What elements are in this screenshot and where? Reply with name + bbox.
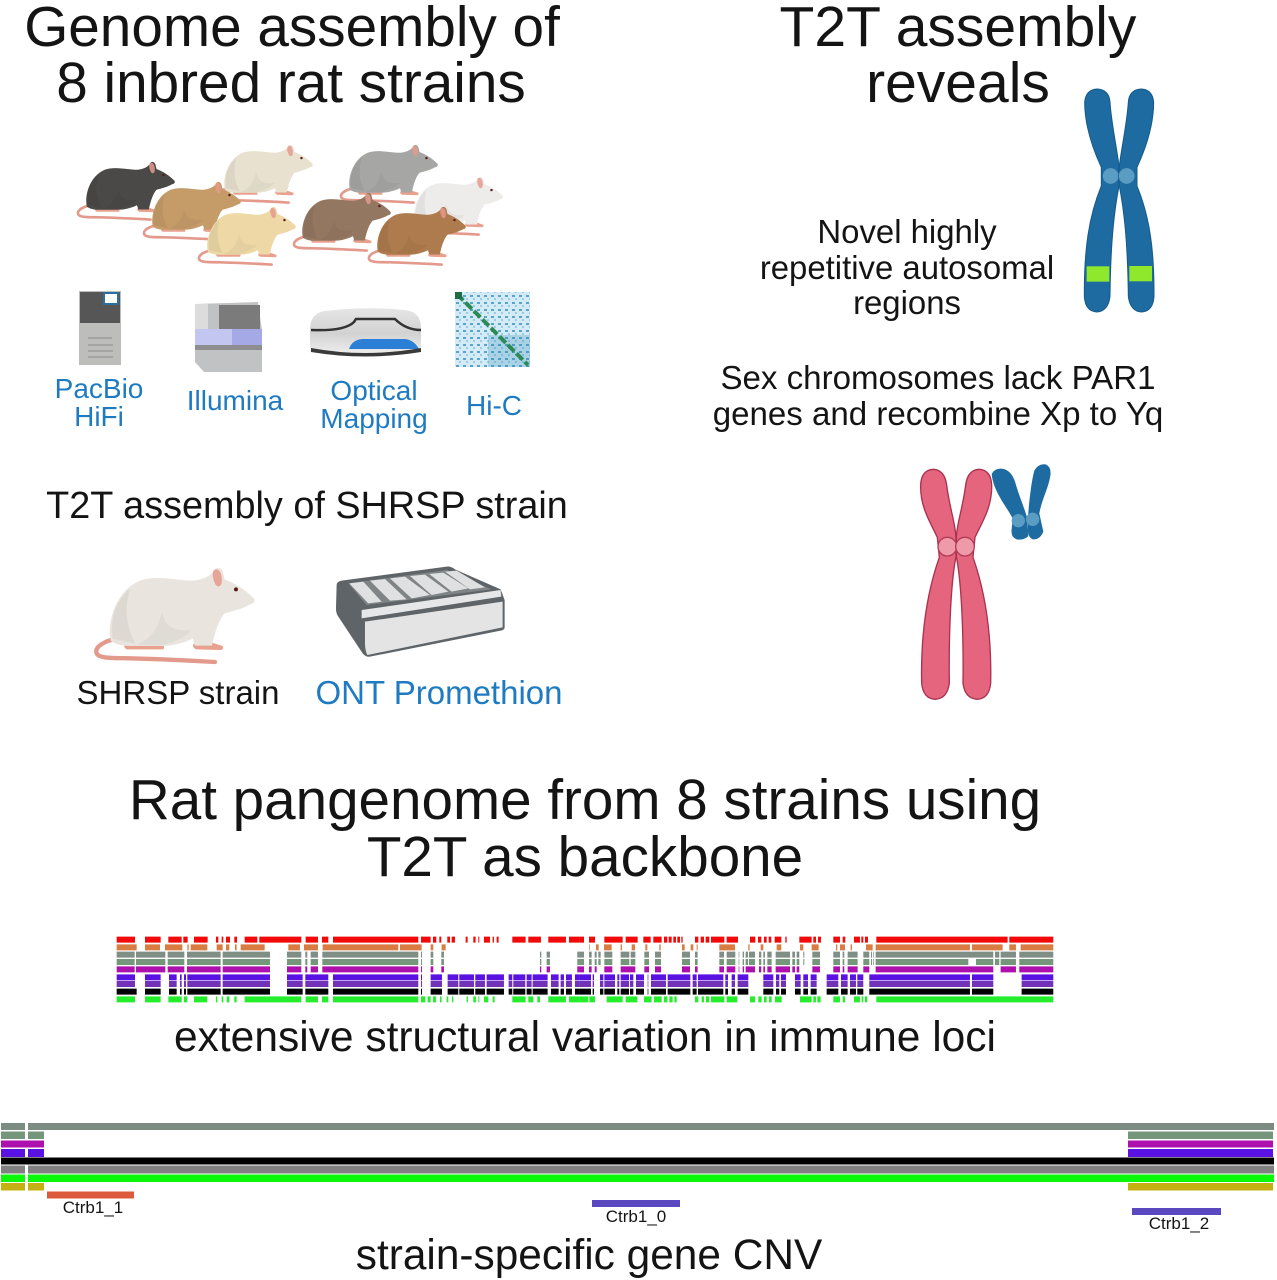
- heading: rat pangenome: Rat pangenome from 8 strains using: [129, 768, 1041, 831]
- icon: Illumina sequencer: [195, 302, 262, 372]
- gene marker: Ctrb1_1: [47, 1192, 134, 1217]
- illustration: SHRSP rat: [96, 568, 255, 662]
- heading: rat pangenome: T2T as backbone: [367, 825, 803, 888]
- text: novel repetitive regions: regions: [853, 284, 961, 321]
- platform labels: [55, 373, 522, 434]
- platform labels: PacBio: [55, 373, 143, 404]
- heading: T2T assembly reveals: reveals: [866, 51, 1050, 115]
- icon: optical mapping instrument: [310, 308, 421, 356]
- platform labels: HiFi: [74, 401, 124, 432]
- gene marker: Ctrb1_2: [1132, 1208, 1221, 1233]
- text: sex chromosomes: genes and recombine Xp to Yq: [713, 396, 1163, 433]
- chart: structural variation alignment tracks: [117, 940, 1053, 999]
- platform labels: Mapping: [320, 403, 428, 434]
- heading: genome assembly: 8 inbred rat strains: [56, 52, 526, 115]
- gene marker: Ctrb1_0: [592, 1200, 680, 1226]
- icon: ONT PromethION sequencer: [336, 567, 505, 657]
- heading: T2T assembly reveals: [780, 0, 1137, 115]
- heading: genome assembly: [24, 0, 560, 115]
- label: SHRSP strain: SHRSP strain: [77, 674, 279, 711]
- platform labels: Hi-C: [466, 390, 522, 421]
- chart: Hi-C contact map: [455, 292, 530, 367]
- caption: strain-specific gene CNV: strain-specific gene CNV: [356, 1231, 823, 1278]
- icon: pink X and blue Y chromosomes: [921, 464, 1051, 699]
- gene marker: Ctrb1_1: Ctrb1_1: [63, 1198, 123, 1217]
- text: novel repetitive regions: repetitive autosomal: [760, 249, 1054, 286]
- icon: blue autosome with green repeat bands: [1084, 89, 1154, 312]
- platform labels: Illumina: [187, 385, 284, 416]
- text: novel repetitive regions: Novel highly: [817, 213, 997, 250]
- text: novel repetitive regions: [760, 213, 1054, 321]
- text: sex chromosomes: [713, 360, 1163, 433]
- illustration: group of eight rat strains: [78, 145, 503, 265]
- gene marker: Ctrb1_0: Ctrb1_0: [606, 1207, 666, 1226]
- heading: rat pangenome: [129, 768, 1041, 888]
- text: sex chromosomes: Sex chromosomes lack PAR1: [720, 360, 1156, 397]
- chart: strain-specific CNV tracks: [1, 1123, 1274, 1191]
- platform labels: Optical: [330, 375, 418, 406]
- caption: structural variation: extensive structural variation in immune loci: [174, 1014, 996, 1061]
- label: ONT Promethion: ONT Promethion: [316, 674, 562, 711]
- gene marker: Ctrb1_2: Ctrb1_2: [1149, 1214, 1209, 1233]
- heading: T2T assembly of SHRSP strain: T2T assembly of SHRSP strain: [46, 485, 568, 527]
- icon: PacBio HiFi sequencer: [79, 291, 121, 365]
